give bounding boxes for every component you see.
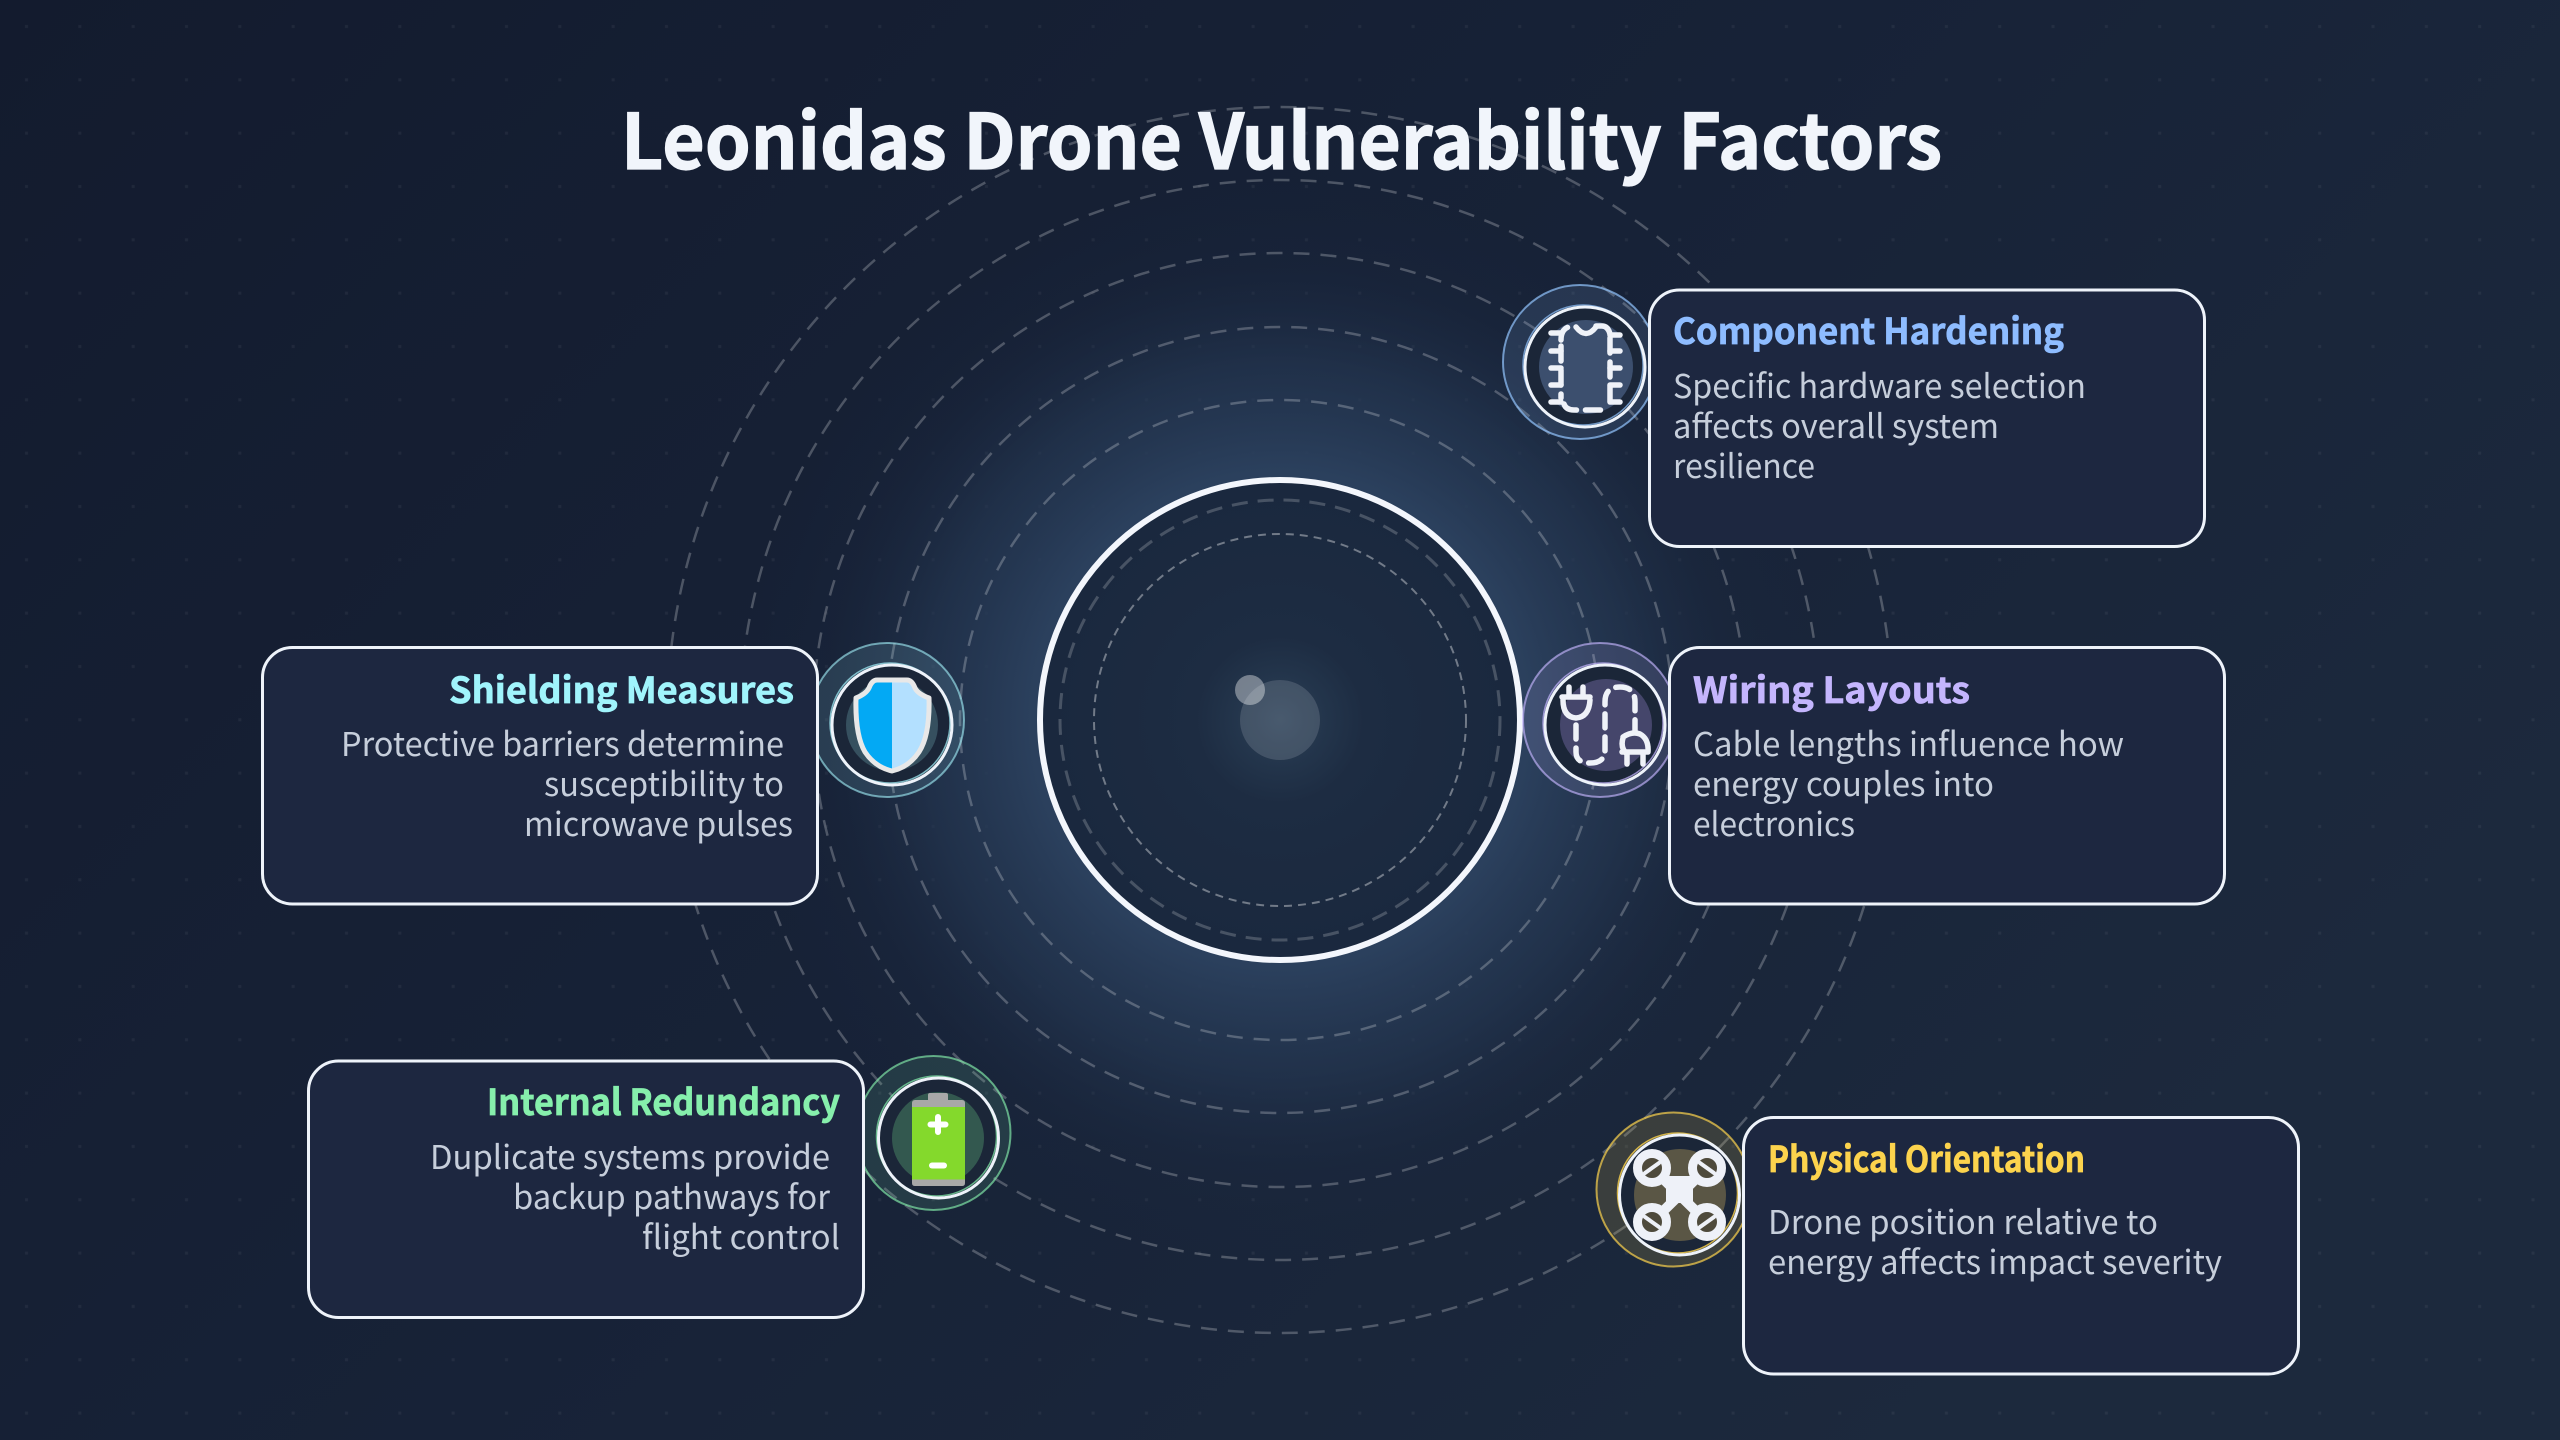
card: physical orientation bbox=[1744, 1118, 2298, 1374]
text: internal redundancy description: backup pathways for bbox=[513, 1171, 830, 1219]
central glow bbox=[740, 180, 1820, 1260]
card: shielding measures bbox=[262, 648, 818, 904]
text: component hardening description bbox=[1673, 360, 2086, 488]
heading: internal redundancy: Internal Redundancy bbox=[487, 1074, 840, 1126]
card: internal redundancy bbox=[308, 1061, 864, 1318]
text: wiring layouts description bbox=[1693, 718, 2124, 846]
text: wiring layouts description: energy couples into bbox=[1693, 758, 1994, 806]
title: Leonidas Drone Vulnerability Factors bbox=[621, 81, 1942, 191]
badge: wiring layouts icon bbox=[1523, 643, 1677, 797]
text: component hardening description: Specific hardware selection bbox=[1673, 360, 2086, 408]
text: shielding measures description: susceptibility to bbox=[544, 758, 784, 806]
central circle bbox=[1040, 480, 1520, 960]
text: component hardening description: affects overall system bbox=[1673, 400, 1999, 448]
card: component hardening bbox=[1650, 290, 2204, 546]
badge: physical orientation drone icon bbox=[1596, 1112, 1750, 1266]
badge: component hardening chip icon bbox=[1503, 285, 1657, 439]
text: physical orientation description: energy affects impact severity bbox=[1768, 1236, 2222, 1284]
text: shielding measures description: microwave pulses bbox=[524, 798, 793, 846]
text: shielding measures description bbox=[341, 718, 793, 846]
concentric dashed rings bbox=[667, 107, 1893, 1333]
heading: component hardening: Component Hardening bbox=[1673, 303, 2064, 355]
text: wiring layouts description: Cable lengths influence how bbox=[1693, 718, 2124, 766]
text: component hardening description: resilience bbox=[1673, 440, 1815, 488]
text: shielding measures description: Protective barriers determine bbox=[341, 718, 784, 766]
badge: internal redundancy battery icon bbox=[856, 1056, 1010, 1210]
text: internal redundancy description: Duplicate systems provide bbox=[430, 1131, 830, 1179]
heading: shielding measures: Shielding Measures bbox=[449, 662, 794, 714]
text: physical orientation description: Drone position relative to bbox=[1768, 1196, 2158, 1244]
badge: shielding measures icon bbox=[810, 643, 964, 797]
text: internal redundancy description: flight control bbox=[642, 1211, 840, 1259]
text: physical orientation description bbox=[1768, 1196, 2222, 1284]
heading: wiring layouts: Wiring Layouts bbox=[1693, 662, 1970, 714]
text: wiring layouts description: electronics bbox=[1693, 798, 1855, 846]
text: internal redundancy description bbox=[430, 1131, 840, 1259]
card: wiring layouts bbox=[1670, 648, 2224, 904]
heading: physical orientation: Physical Orientation bbox=[1768, 1131, 2085, 1183]
